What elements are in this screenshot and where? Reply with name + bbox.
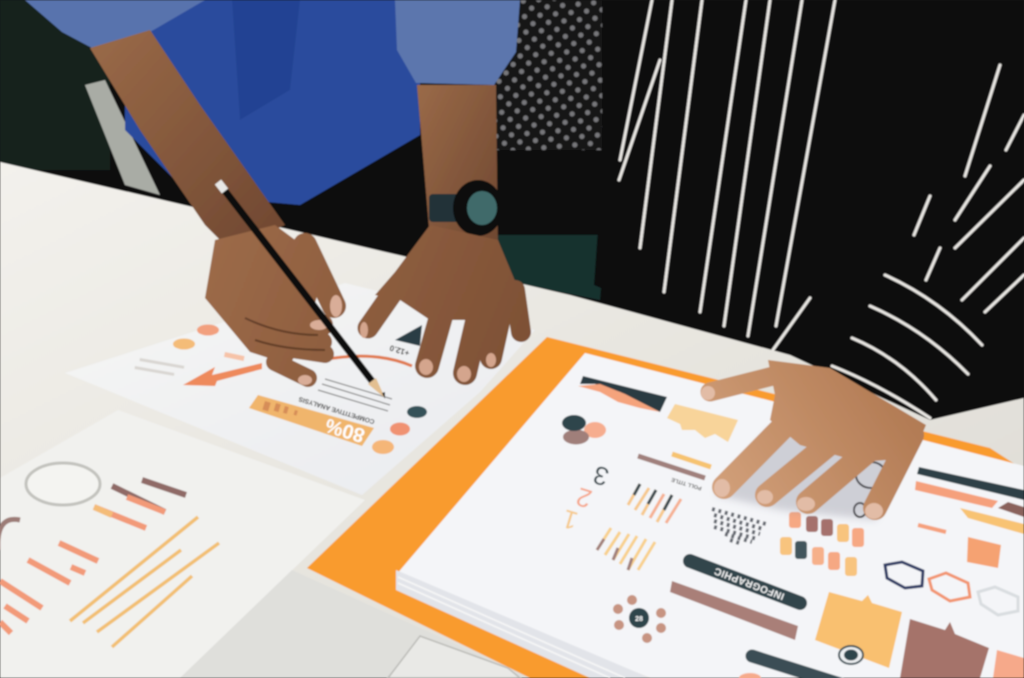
numerals: 1: [559, 504, 581, 536]
bar set two: [597, 528, 655, 570]
person two: striped blouse: [594, 0, 1024, 420]
hexagon badges: [885, 562, 1018, 615]
dark triangle and value: [388, 325, 422, 358]
orange folder: [307, 337, 1024, 678]
palm: [205, 225, 325, 365]
dark triangle and value: +12.0: [388, 343, 411, 358]
numerals: 3: [590, 460, 612, 492]
wristwatch: [429, 180, 503, 236]
left forearm: [90, 30, 285, 250]
competitive analysis text block: [297, 379, 392, 425]
salmon square: [967, 537, 1001, 568]
circle cluster: [613, 595, 666, 643]
right hand on paper: [360, 225, 525, 382]
palm: [375, 225, 525, 320]
laptop: [180, 570, 530, 678]
circle cluster: 28: [635, 616, 643, 623]
80 percent orange banner: [249, 395, 374, 446]
people icon grid: [780, 512, 864, 576]
brown callout: [900, 619, 989, 678]
top right stat banners: [915, 467, 1024, 534]
bubbles: [173, 324, 427, 454]
gauge circle: [26, 463, 100, 505]
brown banner: [670, 581, 798, 640]
infographic banner: [690, 561, 800, 603]
paper stack: [396, 353, 1024, 678]
numerals: [559, 460, 612, 536]
venn circles: [562, 415, 606, 444]
lower dark banner: [739, 656, 840, 678]
yellow torn shape: [667, 404, 738, 442]
numerals: 2: [573, 482, 595, 514]
lower left printed sheet: [0, 410, 365, 678]
small dark medallion: [839, 646, 863, 664]
bar set one: [628, 484, 681, 523]
orange arrow: [183, 356, 412, 386]
trackpad: [388, 636, 520, 678]
right forearm: [417, 85, 498, 250]
right shirt sleeve: [395, 0, 520, 85]
poll title bars: [638, 454, 711, 491]
finger shadow: [715, 430, 915, 520]
80 percent orange banner: 80%: [323, 413, 367, 446]
half ring: [0, 519, 20, 550]
pencil: [218, 182, 385, 399]
dot matrix: [712, 509, 766, 544]
graphics on the top sheet: [559, 376, 1024, 678]
salmon bars: [0, 543, 98, 633]
salmon corner square: [993, 650, 1024, 678]
circle outlines under finger: [854, 462, 886, 517]
stacked bars: [94, 480, 186, 528]
hand on top sheet: [701, 360, 926, 520]
competitive analysis text block: COMPETITIVE ANALYSIS: [297, 395, 376, 425]
wave ribbon: [578, 376, 667, 412]
person one: shirt and trousers: [25, 0, 520, 270]
palm: [768, 360, 926, 462]
left shirt sleeve: [25, 0, 205, 48]
left hand holding pencil: [205, 225, 342, 385]
poll title bars: POLL TITLE: [671, 476, 703, 491]
table: [0, 162, 1024, 678]
yellow callout: [815, 592, 902, 668]
small chart labels: [134, 352, 245, 376]
yellow diagonal bars: [70, 517, 219, 647]
left printed sheet: [65, 283, 535, 495]
infographic banner: INFOGRAPHIC: [713, 565, 786, 601]
